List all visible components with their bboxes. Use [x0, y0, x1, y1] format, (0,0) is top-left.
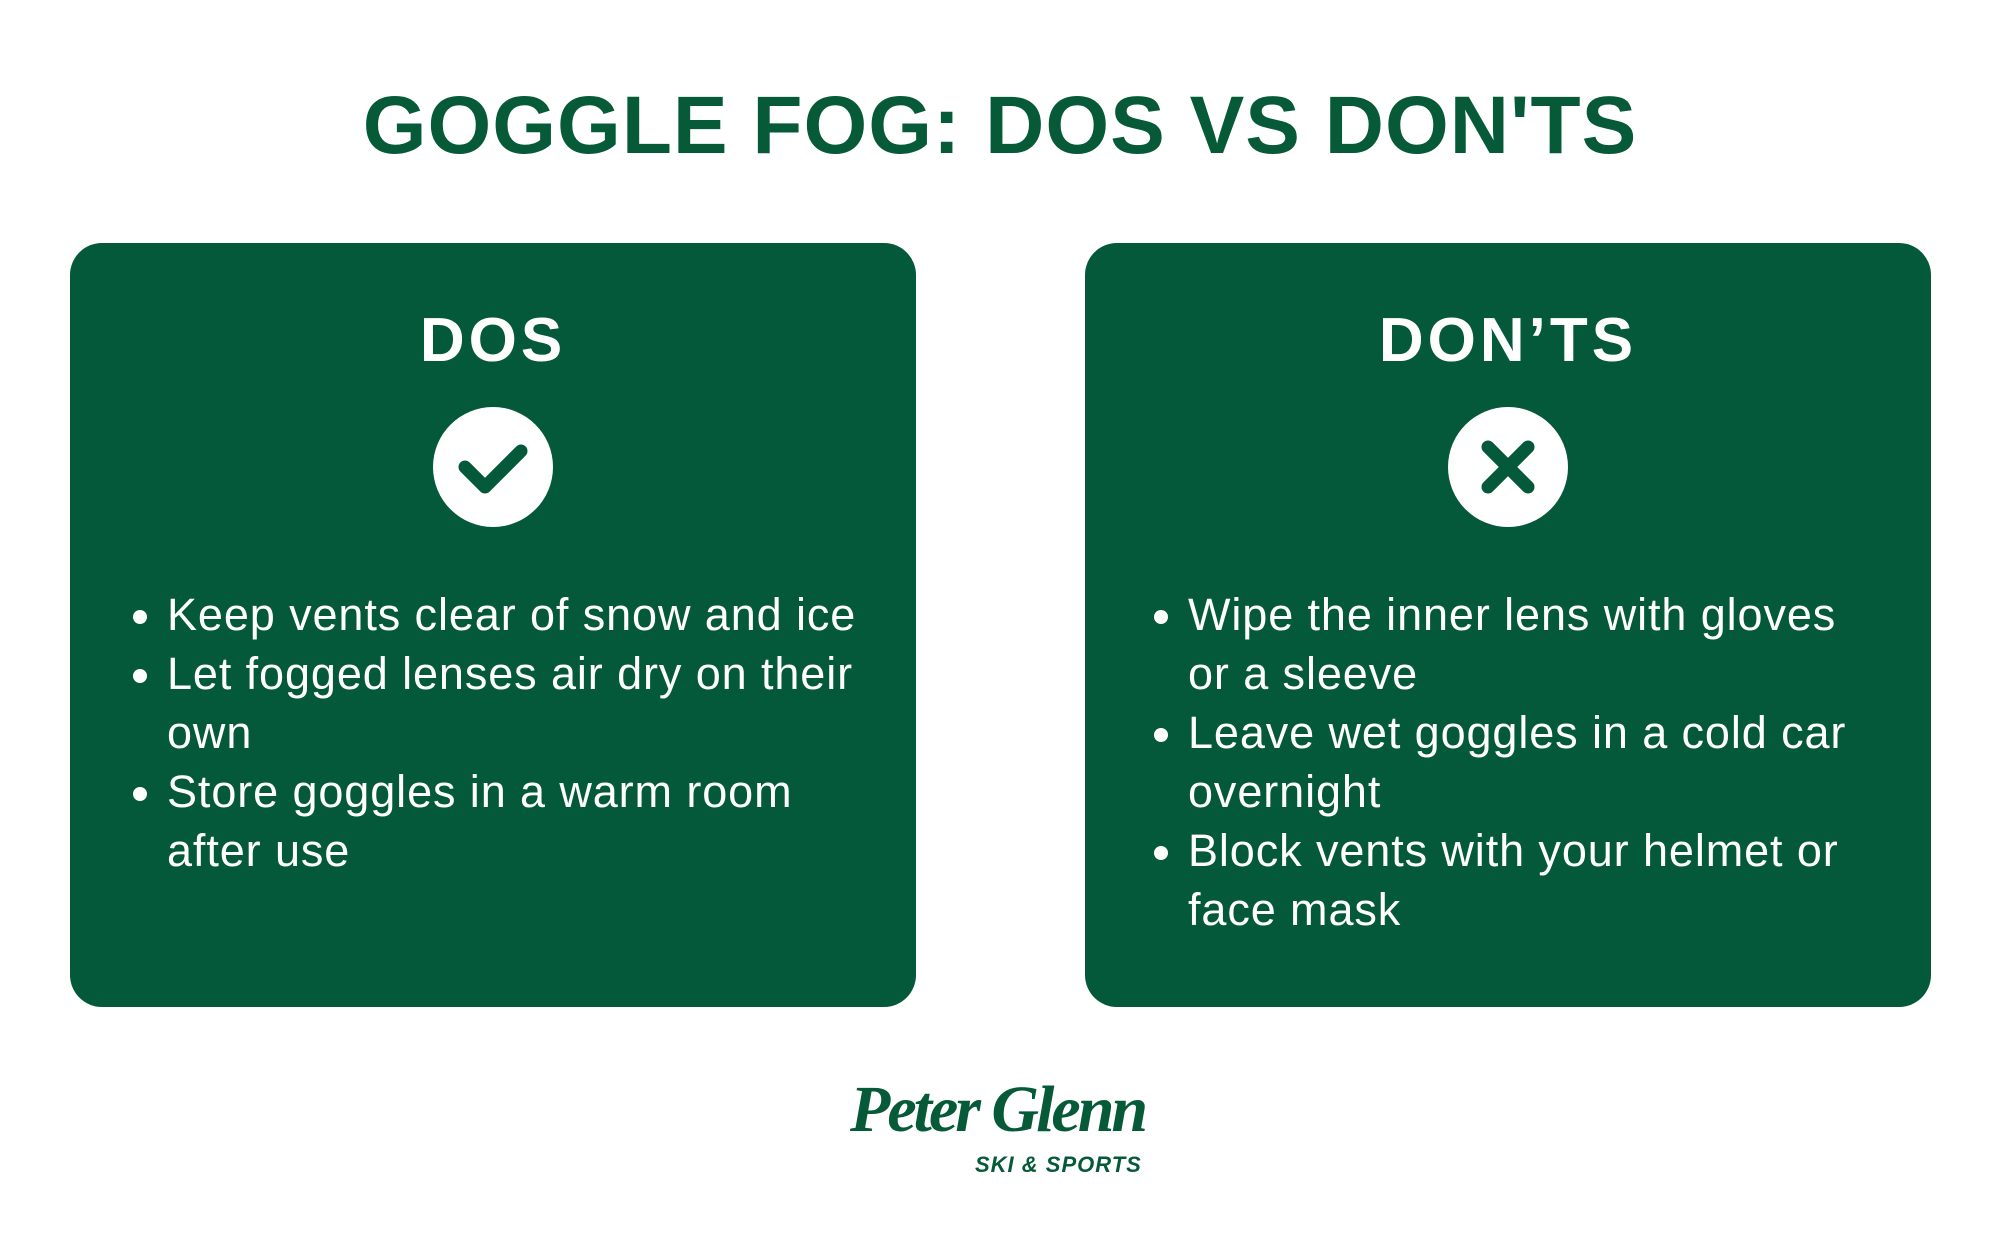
list: donts: [1154, 589, 1846, 935]
list: dos: Let fogged lenses air dry on their own: [167, 648, 853, 758]
list: donts: Block vents with your helmet or face mask: [1188, 825, 1839, 935]
icon: x: [1448, 407, 1568, 527]
list: dos: Store goggles in a warm room after use: [167, 766, 792, 876]
heading: donts: DON’TS: [1379, 306, 1637, 375]
list: dos: [133, 589, 856, 876]
list: donts: Wipe the inner lens with gloves: [1188, 589, 1836, 640]
title: GOGGLE FOG: DOS VS DON'TS: [363, 80, 1637, 171]
logo: SKI & SPORTS: [975, 1152, 1142, 1177]
panel: donts: [1085, 243, 1931, 1007]
list: donts: or a sleeve: [1188, 648, 1418, 699]
logo: Peter Glenn: [850, 1073, 1145, 1146]
icon: check: [433, 407, 553, 527]
heading: dos: DOS: [420, 306, 566, 375]
list: donts: Leave wet goggles in a cold car overnight: [1188, 707, 1846, 817]
list: dos: Keep vents clear of snow and ice: [167, 589, 856, 640]
panel: dos: [70, 243, 916, 1007]
